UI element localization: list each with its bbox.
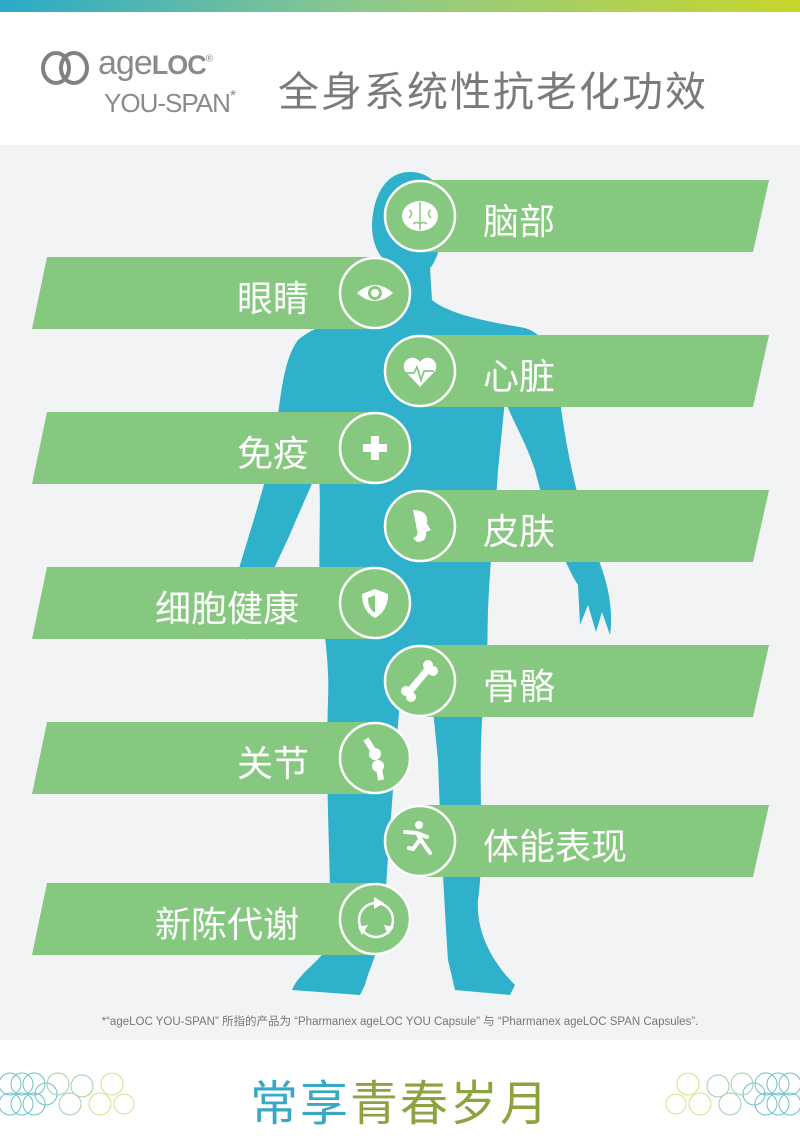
bar: 心脏	[383, 335, 769, 407]
decorative circles right	[660, 1072, 800, 1118]
icon: cross	[363, 436, 387, 460]
bar: 脑部	[383, 180, 769, 252]
bar: 免疫	[32, 412, 410, 484]
bar: 脑部: 脑部	[483, 201, 555, 242]
panel: gray background	[0, 145, 800, 1040]
bar: 细胞健康	[32, 567, 410, 639]
bar: 眼睛	[32, 257, 410, 329]
icon: brain	[402, 201, 438, 231]
bar: 体能表现: 体能表现	[483, 826, 627, 867]
bar: 心脏: 心脏	[483, 356, 555, 397]
bar: 细胞健康: 细胞健康	[155, 588, 299, 629]
icon: face	[413, 510, 431, 542]
icon: heart	[404, 358, 436, 387]
header logo: YOU-SPAN*	[104, 88, 235, 118]
title: 全身系统性抗老化功效	[278, 69, 708, 115]
decorative circles left	[0, 1072, 140, 1118]
bar: 皮肤	[383, 490, 769, 562]
bar: 新陈代谢	[32, 883, 410, 955]
header logo	[38, 48, 258, 118]
bar: 关节	[32, 722, 410, 794]
bar: 皮肤: 皮肤	[483, 511, 555, 552]
icon: logo rings	[38, 50, 94, 90]
bar: 体能表现	[383, 805, 769, 877]
top gradient bar	[0, 0, 800, 12]
header logo: ageLOC®	[98, 44, 212, 82]
icon: runner	[405, 821, 430, 853]
icon: bone	[401, 660, 438, 702]
bar: 免疫: 免疫	[237, 433, 309, 474]
footnote: *“ageLOC YOU-SPAN” 所指的产品为 “Pharmanex ageLOC YOU Capsule” 与 “Pharmanex ageLOC SPAN Capsules”.	[102, 1016, 698, 1028]
bar: 新陈代谢: 新陈代谢	[155, 904, 299, 945]
bar: 骨骼: 骨骼	[483, 666, 555, 707]
slogan: 常享青春岁月	[250, 1078, 550, 1131]
bar: 骨骼	[383, 645, 769, 717]
icon: joint	[366, 739, 384, 780]
bar: 眼睛: 眼睛	[237, 278, 309, 319]
icon: shield	[362, 589, 388, 618]
icon: eye	[357, 285, 393, 301]
bar: 关节: 关节	[237, 743, 309, 784]
icon: cycle arrows	[359, 903, 393, 937]
